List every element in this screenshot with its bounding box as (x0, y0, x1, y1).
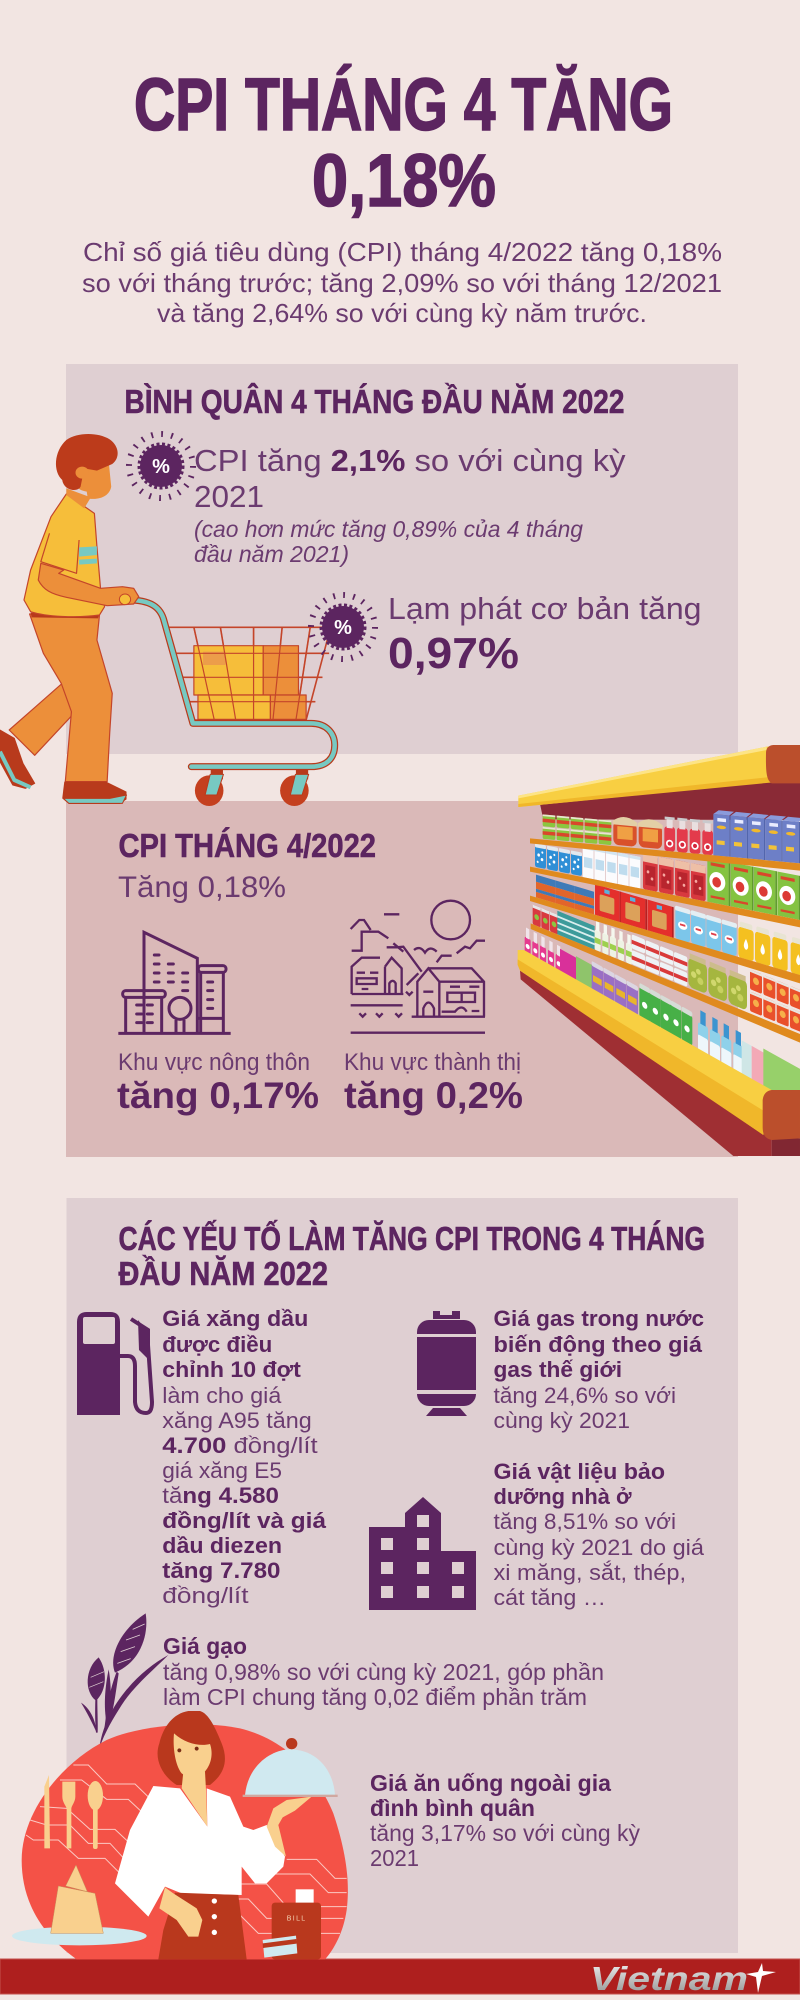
text: giá gas: tăng 24,6% so với (494, 1383, 676, 1408)
neck and face (66, 462, 111, 508)
cart basket (168, 627, 331, 720)
skirt (158, 1893, 247, 1959)
panel: các yếu tố (66, 1198, 738, 1953)
text: lạm phát cơ bản: Lạm phát cơ bản tăng (388, 591, 702, 626)
shelf base underside (520, 971, 772, 1156)
rear shoe (0, 730, 35, 788)
text: giá vật liệu: cùng kỳ 2021 do giá (494, 1535, 705, 1560)
text: giá gạo: làm CPI chung tăng 0,02 điểm phần trăm (163, 1684, 587, 1710)
icon: percent badge 2 (311, 595, 375, 659)
text: giá vật liệu: dưỡng nhà ở (494, 1484, 632, 1509)
neck (182, 1772, 207, 1827)
text: giá gạo (163, 1633, 604, 1710)
cart wheels (195, 769, 309, 806)
text: giá gas: biến động theo giá (494, 1332, 703, 1357)
text: giá xăng dầu: tăng 4.580 (162, 1483, 279, 1508)
title (134, 63, 673, 222)
intro text: so với tháng trước; tăng 2,09% so với tháng 12/2021 (82, 268, 722, 298)
icon: urban houses (351, 901, 485, 1033)
row 1 products (543, 794, 800, 864)
heading: bình quân: BÌNH QUÂN 4 THÁNG ĐẦU NĂM 2022 (124, 383, 624, 420)
icon: percent badge 1: % (152, 456, 170, 478)
cutlery (44, 1775, 103, 1849)
text: giá vật liệu (494, 1459, 705, 1610)
icon: fuel pump (77, 1312, 152, 1415)
text: giá xăng dầu: xăng A95 tăng (162, 1408, 312, 1433)
panel: CPI tháng 4/2022 (66, 801, 738, 1157)
text: giá xăng dầu (162, 1306, 327, 1608)
heading: các yếu tố (118, 1219, 705, 1292)
icon: gas cylinder (417, 1311, 476, 1416)
text: giá gạo: tăng 0,98% so với cùng kỳ 2021, góp phần (163, 1659, 604, 1685)
text: khu vực nông thôn (117, 1049, 319, 1116)
sleeve (41, 533, 79, 573)
text: lạm phát cơ bản: 0,97% (388, 629, 519, 678)
intro text (82, 237, 722, 328)
text: giá vật liệu: tăng 8,51% so với (494, 1509, 676, 1534)
canopy (518, 747, 773, 807)
text: giá gas: cùng kỳ 2021 (494, 1408, 630, 1433)
text: giá xăng dầu: được điều (162, 1332, 272, 1357)
row 3 products (536, 861, 800, 977)
heading: các yếu tố: ĐẦU NĂM 2022 (118, 1255, 328, 1292)
text: giá xăng dầu: đồng/lít (162, 1583, 248, 1608)
title: 0,18% (312, 139, 496, 222)
text: giá xăng dầu: 4.700 đồng/lít (162, 1433, 318, 1458)
panel: bình quân 4 tháng (66, 364, 738, 754)
text: CPI tăng 2,1%: (cao hơn mức tăng 0,89% của 4 tháng (194, 516, 583, 542)
illustration: supermarket shelf (518, 745, 800, 1156)
text: giá xăng dầu: đồng/lít và giá (162, 1508, 327, 1533)
text: giá xăng dầu: tăng 7.780 (162, 1558, 280, 1583)
intro text: và tăng 2,64% so với cùng kỳ năm trước. (157, 298, 647, 328)
shelf base front (518, 950, 772, 1135)
eyes (177, 1747, 199, 1752)
credit card (263, 1936, 297, 1958)
cake (51, 1865, 103, 1933)
row 5 products (525, 913, 800, 1107)
illustration: waitress with food: BILL (287, 1916, 307, 1923)
text: CPI tăng 2,1%: 2021 (194, 479, 264, 514)
text: giá ăn uống: đình bình quân (370, 1795, 535, 1821)
illustration: shopper with cart (0, 434, 335, 806)
heading: CPI tháng 4/2022: CPI THÁNG 4/2022 (118, 827, 376, 864)
red blob background (22, 1724, 348, 1959)
icon: percent badge 2: % (334, 617, 352, 639)
text: khu vực nông thôn: Khu vực nông thôn (118, 1049, 310, 1076)
shelf top interior (540, 782, 800, 820)
text: CPI tăng 2,1%: CPI tăng 2,1% so với cùng kỳ (194, 443, 626, 478)
cloche (286, 1738, 297, 1749)
cart frame (128, 600, 335, 767)
text: giá xăng dầu: làm cho giá (162, 1383, 282, 1408)
text: tăng 0,18%: Tăng 0,18% (118, 871, 286, 904)
text: CPI tăng 2,1% (194, 443, 626, 567)
text: CPI tăng 2,1%: đầu năm 2021) (194, 541, 349, 567)
text: giá xăng dầu: giá xăng E5 (162, 1458, 282, 1483)
belt (31, 613, 99, 618)
zigzag lines (26, 1765, 347, 1933)
text: giá gas: Giá gas trong nước (494, 1306, 704, 1331)
text: giá ăn uống: Giá ăn uống ngoài gia (370, 1770, 611, 1796)
text: giá ăn uống: 2021 (370, 1845, 419, 1871)
row 2 products (535, 824, 800, 920)
buttons (212, 1898, 217, 1935)
logo: Vietnam+ (590, 1960, 776, 1997)
arm (159, 1887, 202, 1937)
front shoe (62, 782, 127, 804)
text: khu vực thành thị (344, 1049, 523, 1116)
back leg (9, 683, 76, 755)
shelf boards (530, 838, 800, 1043)
text: khu vực thành thị: tăng 0,2% (344, 1075, 523, 1116)
shirt (24, 494, 105, 617)
text: giá xăng dầu: dầu diezen (162, 1533, 282, 1558)
text: giá xăng dầu: chỉnh 10 đợt (162, 1357, 302, 1382)
text: giá vật liệu: cát tăng … (494, 1585, 606, 1610)
text: giá gas (494, 1306, 704, 1433)
text: lạm phát cơ bản (388, 591, 702, 678)
icon: rural buildings (118, 932, 231, 1033)
plate (12, 1927, 147, 1945)
hair (158, 1711, 225, 1785)
text: giá vật liệu: xi măng, sắt, thép, (494, 1560, 686, 1585)
bill (296, 1889, 314, 1904)
illustration: waitress with food (12, 1711, 348, 1959)
arm (38, 563, 139, 606)
hair (56, 434, 118, 490)
icon: apartment building (369, 1497, 476, 1610)
shirt band (79, 546, 97, 565)
canopy end cap (766, 745, 800, 783)
cart grip (119, 594, 131, 605)
text: khu vực nông thôn: tăng 0,17% (117, 1075, 319, 1116)
row 4 products (533, 880, 800, 1035)
cart boxes (176, 627, 329, 720)
ear (76, 467, 89, 479)
intro text: Chỉ số giá tiêu dùng (CPI) tháng 4/2022 tăng 0,18% (83, 237, 722, 267)
text: giá vật liệu: Giá vật liệu bảo (494, 1459, 665, 1484)
shelf base end cap (763, 1090, 800, 1140)
icon: wheat (81, 1613, 168, 1748)
text: giá xăng dầu: Giá xăng dầu (162, 1306, 308, 1331)
logo: Vietnam+: Vietnam (590, 1960, 748, 1997)
front leg (30, 614, 112, 782)
footer bar (0, 1959, 800, 1994)
icon: percent badge 1 (129, 434, 193, 498)
shirt (115, 1786, 285, 1917)
text: khu vực thành thị: Khu vực thành thị (344, 1049, 521, 1076)
text: giá gas: gas thế giới (494, 1357, 622, 1382)
text: giá ăn uống: tăng 3,17% so với cùng kỳ (370, 1820, 640, 1846)
raised hand (267, 1797, 312, 1857)
text: giá gạo: Giá gạo (163, 1633, 247, 1659)
face (174, 1733, 212, 1777)
text: giá ăn uống (370, 1770, 640, 1871)
